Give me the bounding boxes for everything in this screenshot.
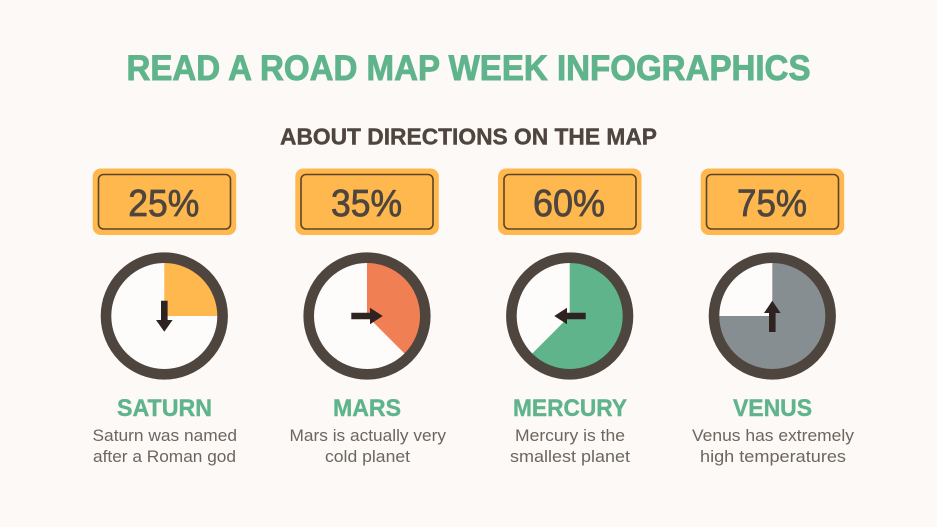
label: Mercury: MERCURY (513, 395, 627, 422)
description: Venus: high temperatures (700, 447, 846, 466)
description: Saturn (92, 426, 237, 466)
description: Mercury: Mercury is the (515, 426, 625, 445)
dial: 60% with left arrow (511, 258, 628, 374)
description: Mercury: smallest planet (510, 447, 630, 466)
dial: 25% with down arrow (106, 258, 223, 374)
description: Mars: Mars is actually very (290, 426, 447, 445)
panel: Venus (692, 168, 855, 466)
title: READ A ROAD MAP WEEK INFOGRAPHICS (126, 49, 810, 88)
percentage badge: 60% (498, 168, 642, 235)
subtitle: ABOUT DIRECTIONS ON THE MAP (280, 124, 657, 150)
description: Mars (290, 426, 447, 466)
panel: Mars (290, 168, 447, 466)
panel: Saturn (92, 168, 237, 466)
description: Mercury (510, 426, 630, 466)
description: Saturn: Saturn was named (92, 426, 237, 445)
percentage badge: 75% (701, 168, 844, 235)
percentage badge: 25%: 25% (128, 183, 199, 225)
description: Venus (692, 426, 855, 466)
percentage badge: 75%: 75% (737, 183, 807, 225)
dial: 75% with up arrow (714, 258, 831, 374)
label: Venus: VENUS (733, 395, 812, 422)
description: Saturn: after a Roman god (93, 447, 236, 466)
description: Mars: cold planet (325, 447, 410, 466)
percentage badge: 60%: 60% (533, 183, 605, 225)
label: Saturn: SATURN (117, 395, 212, 422)
dial: 35% with right arrow (309, 258, 425, 374)
panel: Mercury (498, 168, 642, 466)
percentage badge: 35% (295, 168, 439, 235)
description: Venus: Venus has extremely (692, 426, 855, 445)
percentage badge: 35%: 35% (331, 183, 402, 225)
label: Mars: MARS (333, 395, 401, 422)
percentage badge: 25% (93, 168, 236, 235)
